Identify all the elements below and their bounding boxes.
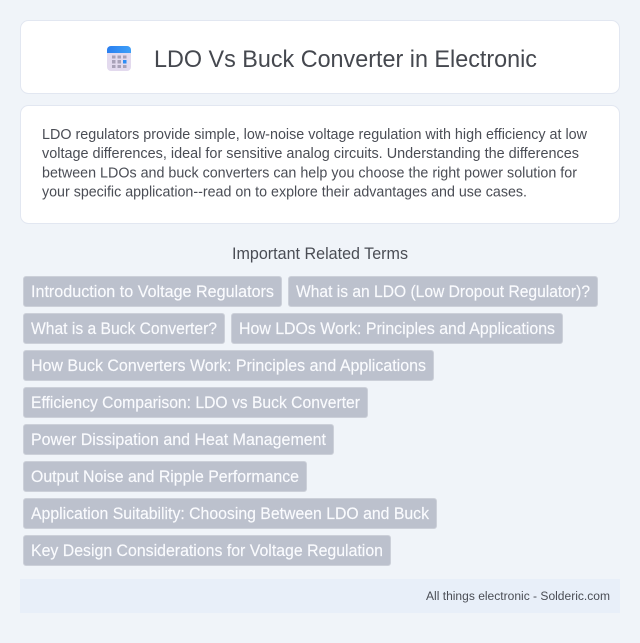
- panel: introduction text: [20, 106, 620, 224]
- tag: what is a buck converter: [24, 314, 224, 344]
- tag: what is an LDO: What is an LDO (Low Dropout Regulator)?: [296, 283, 590, 301]
- panel: introduction text: between LDOs and buck converters can help you choose the right power solution for: [42, 166, 577, 182]
- footer: [20, 579, 620, 613]
- footer: All things electronic - Solderic.com: [426, 589, 610, 603]
- panel: introduction text: LDO regulators provide simple, low-noise voltage regulation with high efficiency at low: [42, 127, 587, 143]
- tag: key design considerations: [24, 536, 390, 566]
- tag: what is an LDO: [288, 276, 598, 306]
- tag: introduction to voltage regulators: [24, 276, 282, 306]
- tag: output noise: [24, 462, 306, 492]
- tag: output noise: Output Noise and Ripple Performance: [31, 468, 299, 486]
- panel: introduction text: your specific application--read on to explore their advantages and use cases.: [42, 184, 527, 200]
- tag: application suitability: [24, 498, 436, 528]
- tag: efficiency comparison: [24, 388, 368, 418]
- tag: how buck converters work: How Buck Converters Work: Principles and Applications: [31, 357, 426, 375]
- tag: what is a buck converter: What is a Buck Converter?: [31, 320, 217, 338]
- tag: efficiency comparison: Efficiency Comparison: LDO vs Buck Converter: [31, 394, 360, 412]
- tag: power dissipation: Power Dissipation and Heat Management: [31, 431, 326, 449]
- panel: header card: [20, 20, 620, 94]
- title: LDO Vs Buck Converter in Electronic: [154, 46, 537, 73]
- tag: how buck converters work: [24, 350, 434, 380]
- tag: introduction to voltage regulators: Introduction to Voltage Regulators: [31, 283, 274, 301]
- tag: key design considerations: Key Design Considerations for Voltage Regulation: [31, 542, 383, 560]
- tag: how LDOs work: How LDOs Work: Principles and Applications: [239, 320, 555, 338]
- tag: application suitability: Application Suitability: Choosing Between LDO and Buck: [31, 505, 430, 523]
- tag: how LDOs work: [232, 314, 562, 344]
- panel: introduction text: voltage differences, ideal for sensitive analog circuits. Understanding the differences: [42, 146, 579, 162]
- icon: calendar grid: [107, 46, 131, 71]
- tag: power dissipation: [24, 424, 334, 454]
- heading: related terms: Important Related Terms: [232, 245, 408, 263]
